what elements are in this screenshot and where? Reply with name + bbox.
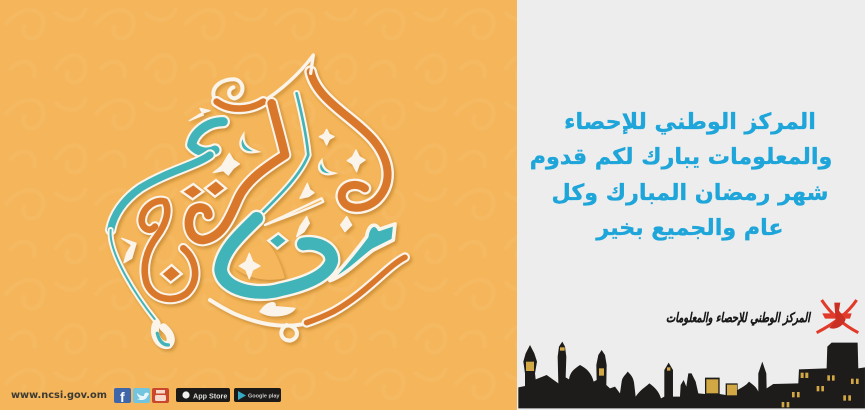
logo text: national centre name: المركز الوطني للإحصاء والمعلومات [666, 311, 812, 326]
panel: right grey background [517, 0, 865, 410]
ornament: star above mim [341, 217, 352, 232]
windows: lit yellow [526, 347, 859, 407]
badge: App Store: App Store [193, 392, 227, 400]
mark: teal drop upper [240, 135, 257, 152]
stroke: left bottom drop [155, 323, 171, 345]
stroke: teal thick bowl [221, 218, 332, 292]
badge: App Store [176, 388, 230, 402]
ornament: star upper [319, 129, 334, 145]
stroke: inner bowl cut [233, 243, 285, 280]
ornament: star low mid [297, 217, 309, 237]
mark: teal drop middle [319, 161, 334, 174]
icon: Facebook [114, 388, 131, 405]
stroke: bottom orange sweep [210, 257, 405, 326]
panel: orange patterned background [0, 0, 517, 410]
greeting text block [530, 109, 832, 241]
stroke: bottom loop [281, 325, 297, 341]
ornament: star right [347, 150, 365, 172]
stroke: right big orange bulb [311, 72, 388, 208]
footer: website address: www.ncsi.gov.om [11, 390, 107, 401]
diamond: orange noon dot [161, 265, 182, 283]
ornament: star mid [300, 183, 314, 198]
diamond: orange pair left [182, 184, 203, 199]
greeting line 3: شهر رمضان المبارك وكل [552, 180, 828, 206]
stroke: left teal head [192, 122, 223, 152]
greeting line 2: والمعلومات يبارك لكم قدوم [530, 144, 832, 170]
stroke: left teal sweep [111, 155, 210, 322]
badge: Google Play: Google play [248, 394, 280, 400]
greeting line 4: عام والجميع بخير [596, 215, 784, 241]
ornament: star left [213, 153, 239, 175]
icon: Twitter [133, 388, 150, 403]
ornament: left accent [122, 238, 136, 263]
icon: YouTube [152, 388, 169, 403]
diamond: orange pair right [205, 180, 226, 197]
ornament: bottom flourish [260, 303, 295, 316]
badge: Google Play [234, 388, 281, 402]
emblem: crossed swords and khanjar [817, 300, 858, 333]
ornaments: white stars [122, 108, 365, 316]
greeting line 1: المركز الوطني للإحصاء [564, 109, 816, 135]
ornament: top accent [189, 108, 210, 121]
icon: Facebook: f [120, 389, 125, 405]
ornament: star lower [239, 253, 260, 279]
calligraphy: Ramadan Kareem [111, 55, 405, 345]
stroke: top curl and tip [213, 55, 313, 109]
stroke: teal mim right [330, 224, 395, 281]
stroke: kareem lam orange [189, 103, 285, 240]
mark: kashida bar [265, 198, 323, 225]
skyline silhouette [518, 342, 865, 408]
stroke: teal central thin alif [257, 93, 308, 218]
stroke: noon orange [142, 201, 195, 299]
diamond: teal dot [268, 233, 287, 249]
